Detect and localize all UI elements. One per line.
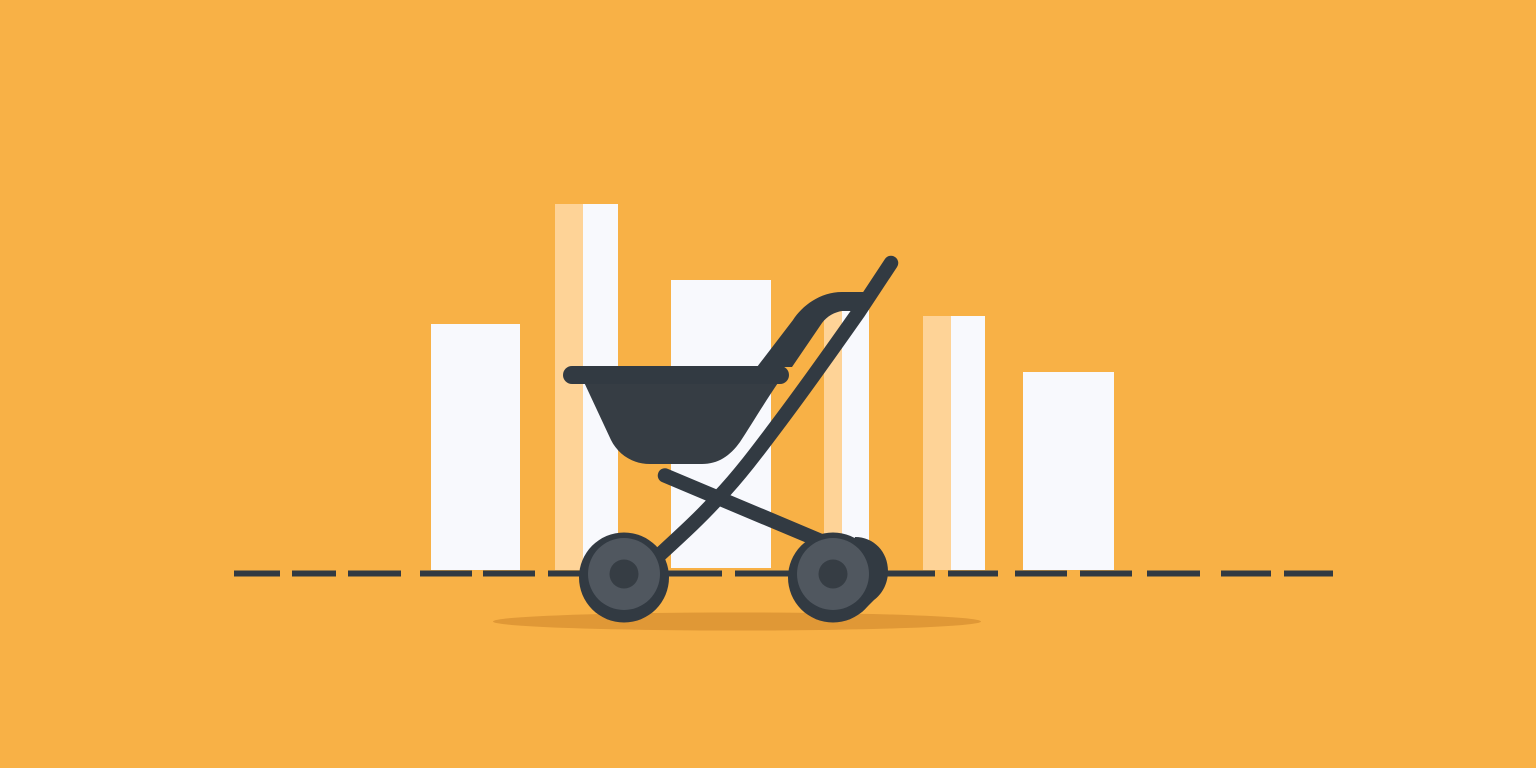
bar chart (431, 204, 1114, 570)
dashed ground line (234, 570, 1333, 576)
icon: rear wheel backing (840, 537, 888, 612)
icon: stroller frame (654, 263, 891, 560)
icon: stroller handle (757, 292, 864, 367)
icon: seat rim (563, 366, 789, 384)
icon: stroller seat (583, 380, 780, 464)
ground shadow (493, 612, 981, 630)
stroller (563, 263, 891, 622)
icon: left wheel (579, 532, 669, 622)
icon: right wheel (788, 532, 878, 622)
